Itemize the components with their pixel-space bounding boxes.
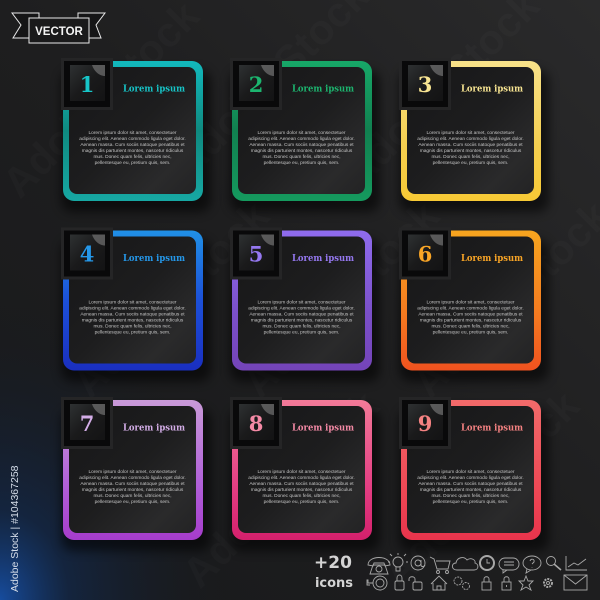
body text 6: adipiscing elit. Aenean commodo ligula eget dolor. [417,306,524,312]
body text 2: magnis dis parturient montes, nascetur ridiculus [251,148,353,154]
text: Adobe Stock [173,381,388,596]
icon: house [431,576,447,590]
body text 2: mus. Donec quam felis, ultricies nec, [262,154,341,160]
title 3: Lorem ipsum [461,84,523,94]
body text 2: adipiscing elit. Aenean commodo ligula eget dolor. [248,136,355,142]
body text 2: Lorem ipsum dolor sit amet, consectetuer [258,130,346,136]
icon: lock with keyhole [502,577,511,590]
body text 5: adipiscing elit. Aenean commodo ligula eget dolor. [248,306,355,312]
icon: cloud [452,558,478,570]
number box 5: 5 [249,242,263,266]
body text 5: magnis dis parturient montes, nascetur ridiculus [251,318,353,324]
icon: question bubble [523,556,541,573]
number box 3: 3 [418,72,432,97]
body text 2: pellentesque eu, pretium quis, sem. [264,160,339,166]
icon: star [519,576,533,590]
body text 7: pellentesque eu, pretium quis, sem. [95,499,170,505]
icon: envelope [564,575,587,590]
body text 3: pellentesque eu, pretium quis, sem. [433,160,508,166]
body text 7: adipiscing elit. Aenean commodo ligula eget dolor. [79,475,186,481]
body text 5: Aenean massa. Cum sociis natoque penatibus et [249,312,354,318]
icon: gear [544,579,552,587]
title 6: Lorem ipsum [461,253,523,264]
body text 8: mus. Donec quam felis, ultricies nec, [262,493,341,499]
card 6 [399,228,549,382]
body text 7: Aenean massa. Cum sociis natoque penatibus et [80,481,185,487]
body text 1: pellentesque eu, pretium quis, sem. [95,160,170,166]
body text 9: pellentesque eu, pretium quis, sem. [433,499,508,505]
text: Adobe Stock [373,381,588,596]
+20 icons label [314,553,353,591]
title 1: Lorem ipsum [123,84,185,94]
number box 1 [61,58,113,110]
body text 7: magnis dis parturient montes, nascetur ridiculus [82,487,184,493]
title 5: Lorem ipsum [292,253,354,264]
icon set [367,553,587,590]
card 2 [230,58,380,212]
body text 1: magnis dis parturient montes, nascetur ridiculus [82,148,184,154]
body text 4: magnis dis parturient montes, nascetur ridiculus [82,318,184,324]
body text 6: magnis dis parturient montes, nascetur ridiculus [420,318,522,324]
number box 7: 7 [80,411,94,436]
body text 3: adipiscing elit. Aenean commodo ligula eget dolor. [417,136,524,142]
number box 2 [230,58,282,110]
card 3 [399,58,549,212]
+20 icons label: +20 [314,553,352,573]
body text 3: mus. Donec quam felis, ultricies nec, [431,154,510,160]
number box 6 [399,228,451,280]
body text 7: mus. Donec quam felis, ultricies nec, [93,493,172,499]
body text 9: mus. Donec quam felis, ultricies nec, [431,493,510,499]
title 7: Lorem ipsum [123,422,185,434]
badge: VECTOR ribbon [12,13,105,43]
card 9 [399,397,549,551]
icon: clock [480,556,494,570]
body text 6: Aenean massa. Cum sociis natoque penatibus et [418,312,523,318]
number box 7 [61,397,113,449]
number box 6: 6 [418,242,432,266]
body text 6: pellentesque eu, pretium quis, sem. [433,330,508,336]
title 9: Lorem ipsum [461,422,523,434]
icon: padlock closed [395,575,404,590]
body text 8: magnis dis parturient montes, nascetur ridiculus [251,487,353,493]
body text 4: mus. Donec quam felis, ultricies nec, [93,324,172,330]
body text 9: adipiscing elit. Aenean commodo ligula eget dolor. [417,475,524,481]
body text 8: adipiscing elit. Aenean commodo ligula eget dolor. [248,475,355,481]
title 4: Lorem ipsum [123,253,185,264]
body text 6: mus. Donec quam felis, ultricies nec, [431,324,510,330]
icon: chat bubbles [499,558,519,573]
body text 1: Lorem ipsum dolor sit amet, consectetuer [89,130,177,136]
body text 9: Aenean massa. Cum sociis natoque penatibus et [418,481,523,487]
icon: at sign [411,556,425,570]
text: Adobe Stock [233,191,448,406]
text: Adobe Stock [63,191,278,406]
body text 9: magnis dis parturient montes, nascetur ridiculus [420,487,522,493]
body text 1: Aenean massa. Cum sociis natoque penatibus et [80,142,185,148]
body text 1: adipiscing elit. Aenean commodo ligula eget dolor. [79,136,186,142]
number box 8: 8 [249,411,263,436]
number box 3 [399,58,451,110]
icon: light bulb [388,553,408,571]
body text 4: Aenean massa. Cum sociis natoque penatibus et [80,312,185,318]
number box 4 [61,228,113,280]
body text 4: Lorem ipsum dolor sit amet, consectetuer [89,300,177,306]
icon: telephone [368,558,390,574]
card 7 [61,397,211,551]
number box 2: 2 [249,72,263,97]
number box 5 [230,228,282,280]
body text 8: Aenean massa. Cum sociis natoque penatibus et [249,481,354,487]
icon: lock tall [482,577,491,590]
card 1 [61,58,211,212]
body text 5: mus. Donec quam felis, ultricies nec, [262,324,341,330]
body text 3: magnis dis parturient montes, nascetur ridiculus [420,148,522,154]
body text 2: Aenean massa. Cum sociis natoque penatibus et [249,142,354,148]
body text 4: adipiscing elit. Aenean commodo ligula eget dolor. [79,306,186,312]
+20 icons label: icons [315,576,353,591]
number box 9 [399,397,451,449]
body text 5: pellentesque eu, pretium quis, sem. [264,330,339,336]
body text 5: Lorem ipsum dolor sit amet, consectetuer [258,300,346,306]
body text 8: Lorem ipsum dolor sit amet, consectetuer [258,469,346,475]
number box 9: 9 [418,411,432,436]
icon: gears [454,577,470,590]
body text 6: Lorem ipsum dolor sit amet, consectetuer [427,300,515,306]
body text 8: pellentesque eu, pretium quis, sem. [264,499,339,505]
body text 3: Aenean massa. Cum sociis natoque penatibus et [418,142,523,148]
number box 1: 1 [80,72,94,97]
icon: key ring [367,576,387,590]
number box 4: 4 [80,242,94,266]
body text 4: pellentesque eu, pretium quis, sem. [95,330,170,336]
title 8: Lorem ipsum [292,422,354,434]
icon: padlock open [409,577,422,590]
body text 3: Lorem ipsum dolor sit amet, consectetuer [427,130,515,136]
stock credit vertical text: Adobe Stock | #104367258 [9,465,21,592]
icon: line chart [566,556,587,570]
body text 1: mus. Donec quam felis, ultricies nec, [93,154,172,160]
icon: magnifier [546,556,561,570]
badge: VECTOR ribbon: VECTOR [35,26,84,38]
title 2: Lorem ipsum [292,84,354,94]
icon: cart [430,557,450,574]
body text 9: Lorem ipsum dolor sit amet, consectetuer [427,469,515,475]
body text 7: Lorem ipsum dolor sit amet, consectetuer [89,469,177,475]
card 4 [61,228,211,382]
card 8 [230,397,380,551]
number box 8 [230,397,282,449]
card 5 [230,228,380,382]
